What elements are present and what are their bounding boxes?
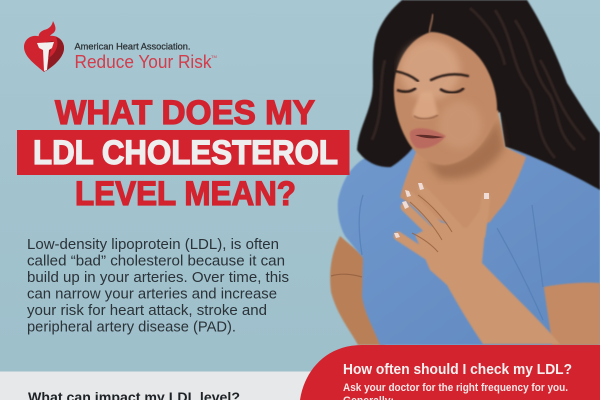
- icon: heart and torch: [24, 21, 64, 72]
- blue shirt: [338, 146, 600, 345]
- eyes: [397, 88, 464, 93]
- panel: how often should I check my LDL: [300, 345, 600, 400]
- trademark: TM: [211, 54, 217, 59]
- arm crease: [331, 274, 362, 277]
- title highlight: LDL CHOLESTEROL: [33, 134, 338, 172]
- tagline: Reduce Your Risk: [74, 51, 212, 72]
- mouth: [410, 128, 446, 148]
- photo: woman holding her chest: [330, 0, 600, 345]
- intro paragraph: your risk for heart attack, stroke and: [27, 303, 267, 319]
- intro paragraph: build up in your arteries. Over time, this: [27, 270, 289, 286]
- nose: [413, 92, 438, 119]
- hair texture: [372, 8, 585, 158]
- right upper arm: [544, 283, 600, 345]
- hair parting: [429, 14, 433, 33]
- neck shadow: [425, 118, 504, 179]
- nostril shadow: [414, 115, 438, 119]
- panel: how often should I check my LDL: Ask your doctor for the right frequency for you.: [343, 382, 568, 394]
- intro paragraph: called “bad” cholesterol because it can: [27, 254, 285, 270]
- intro paragraph: peripheral artery disease (PAD).: [27, 320, 236, 336]
- fingernails: [394, 183, 489, 238]
- eyebrows: [395, 71, 468, 81]
- panel: how often should I check my LDL: How often should I check my LDL?: [343, 362, 572, 378]
- finger lines: [410, 195, 452, 252]
- organization name: American Heart Association.: [74, 42, 190, 52]
- face: [394, 32, 497, 165]
- sleeve seam: [359, 195, 543, 320]
- face highlight: [400, 40, 460, 100]
- intro paragraph: [27, 237, 289, 336]
- neck and chest: [400, 110, 526, 230]
- title line 1: WHAT DOES MY: [55, 94, 315, 132]
- intro paragraph: can narrow your arteries and increase: [27, 286, 277, 302]
- logo: American Heart Association Reduce Your Risk: [24, 21, 217, 72]
- intro paragraph: Low-density lipoprotein (LDL), is often: [27, 237, 279, 253]
- left arm: [330, 236, 385, 345]
- hair: [357, 0, 600, 190]
- panel: what can impact my LDL level: [0, 372, 320, 400]
- hand and forearm: [398, 189, 560, 344]
- title line 3: LEVEL MEAN?: [75, 175, 296, 213]
- mouth opening: [415, 135, 444, 138]
- cheek highlight: [438, 101, 482, 149]
